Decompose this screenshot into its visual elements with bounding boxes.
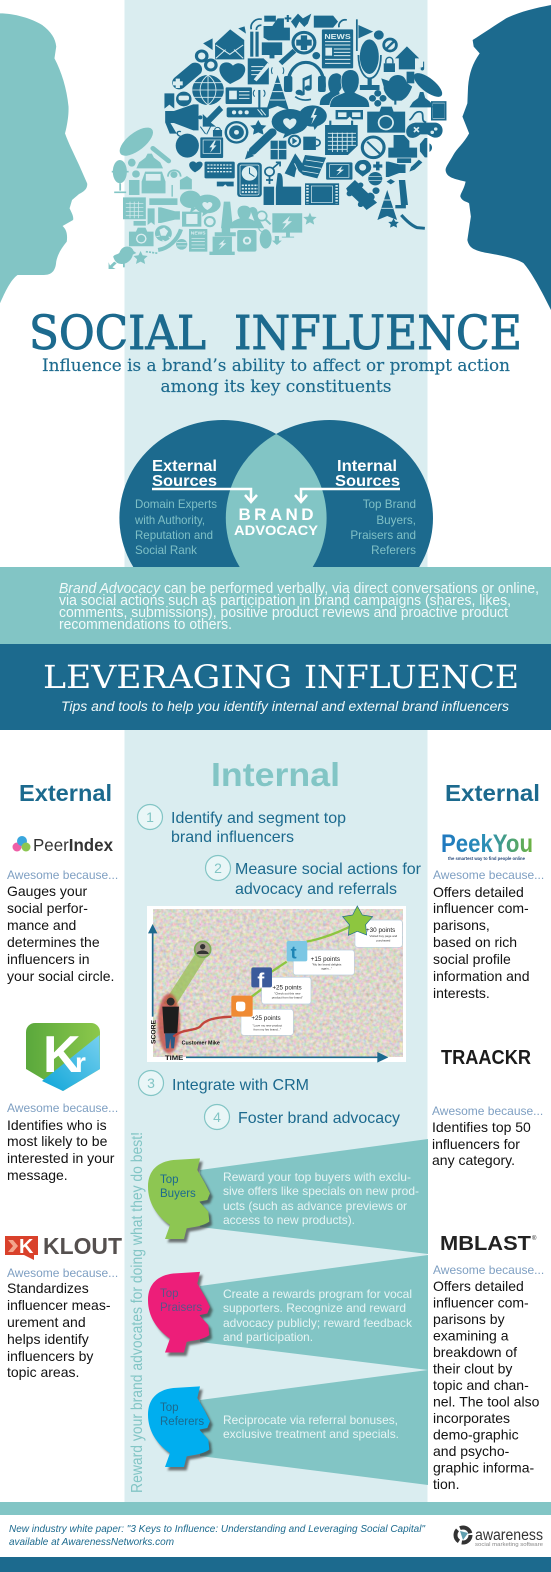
text: traackr: Awesome because... — [432, 1104, 543, 1118]
subtitle — [42, 356, 510, 397]
venn: internal sources text: Buyers, — [376, 514, 416, 527]
step 3 — [138, 1070, 309, 1096]
logo: klout: KLOUT — [43, 1233, 122, 1259]
logo: peerindex: PeerIndex — [33, 835, 113, 855]
logo: peekyou: PeekYou — [441, 830, 533, 858]
icon: star — [343, 906, 373, 935]
beam: buyers — [200, 1139, 428, 1254]
text: mblast: Awesome because... — [433, 1263, 544, 1277]
step 1 — [138, 804, 346, 846]
text: praisers — [223, 1288, 412, 1344]
panel: leveraging influence banner: INFLUENCE — [304, 658, 519, 696]
chart: callout 15 points: +15 points — [311, 956, 340, 963]
text: peekyou: interests. — [433, 985, 490, 1001]
text: peerindex: Gauges your — [7, 883, 87, 899]
step 3: 3 — [147, 1075, 155, 1091]
venn: external circle — [119, 420, 276, 567]
head: referers — [148, 1386, 213, 1470]
label: buyers: Buyers — [160, 1188, 196, 1200]
label: praisers: Praisers — [160, 1302, 202, 1314]
logo: kred: K — [43, 1026, 81, 1084]
icon: facebook: f — [257, 969, 264, 992]
beam: referers — [200, 1370, 428, 1485]
chart: callout 30 points — [355, 920, 402, 947]
text: buyers: access to new products). — [223, 1214, 355, 1227]
panel: leveraging influence banner — [0, 644, 551, 730]
text: traackr: Identifies top 50 — [432, 1119, 531, 1135]
arrow: internal to advocacy — [295, 489, 400, 502]
icon: twitter: t — [291, 942, 297, 962]
text: peekyou: information and — [433, 968, 530, 984]
step 2: Measure social actions for — [235, 861, 422, 878]
step 2 — [206, 856, 422, 898]
chart: score axis — [148, 924, 157, 1044]
panel: brand advocacy definition: comments, submissions), positive product reviews and proactive product — [59, 605, 508, 621]
text: praisers: and participation. — [223, 1331, 313, 1344]
chart: red path — [173, 1017, 232, 1037]
text: mblast: nel. The tool also — [433, 1394, 540, 1410]
footer note: available at AwarenessNetworks.com — [9, 1536, 174, 1548]
vertical label: Reward your brand advocates for doing what they do best! — [129, 1132, 146, 1493]
chart: customer score over time — [147, 906, 406, 1063]
text: peerindex: influencers in — [7, 951, 90, 967]
step 4: 4 — [213, 1109, 221, 1125]
logo: klout — [5, 1233, 122, 1260]
panel: top buyers — [148, 1139, 428, 1254]
text: mblast: examining a — [433, 1328, 509, 1344]
text: klout: influencer meas- — [7, 1297, 111, 1313]
text: klout: Standardizes — [7, 1280, 89, 1296]
text: klout: helps identify — [7, 1331, 89, 1347]
chart: callout 25 points — [241, 1009, 293, 1035]
title — [29, 306, 522, 361]
icon: twitter — [287, 941, 307, 962]
text: kred: Awesome because... — [7, 1101, 118, 1115]
panel: brand advocacy definition: via social actions such as participation in brand campaigns (shares, likes, — [59, 593, 511, 609]
logo: traackr: TRAACKR — [441, 1046, 531, 1069]
icon: facebook — [251, 967, 272, 992]
text: peekyou — [433, 868, 544, 1001]
label: praisers — [160, 1288, 202, 1314]
chart: score axis: SCORE — [150, 1020, 157, 1044]
text: mblast: graphic informa- — [433, 1460, 534, 1476]
venn: internal sources text: Top Brand — [363, 498, 416, 511]
right face silhouette — [446, 5, 551, 310]
panel: top referers — [148, 1370, 428, 1485]
footer dark band — [0, 1557, 551, 1572]
text: mblast: influencer com- — [433, 1294, 529, 1310]
logo: peekyou: the smartest way to find people online — [448, 856, 525, 862]
logo: mblast: MBLAST — [440, 1233, 531, 1255]
text: peekyou: parisons, — [433, 917, 490, 933]
logo: awareness: social marketing software — [475, 1542, 543, 1548]
brand advocacy label: BRAND — [238, 505, 314, 524]
text: traackr — [432, 1104, 543, 1168]
text: peekyou: social profile — [433, 951, 511, 967]
text: klout: urement and — [7, 1314, 86, 1330]
venn: internal sources text: Referers — [371, 544, 416, 557]
heading: external right: External — [445, 780, 540, 806]
head: buyers — [148, 1158, 213, 1242]
chart: customer figure — [158, 993, 180, 1053]
text: klout — [7, 1266, 118, 1380]
chart: callout 25 points facebook: "Check out this new — [274, 992, 301, 996]
chart: green beam — [163, 949, 208, 1007]
chart: callout 25 points facebook — [262, 977, 311, 1004]
text: mblast — [433, 1263, 544, 1492]
text: buyers: ucts (such as advance previews or — [223, 1200, 407, 1213]
label: referers: Top — [160, 1402, 179, 1414]
text: peerindex: social perfor- — [7, 900, 88, 916]
chart: time axis — [165, 1052, 388, 1063]
speech bubble: dark media icons — [164, 14, 446, 228]
text: kred: Identifies who is — [7, 1117, 107, 1133]
step 1: brand influencers — [171, 829, 294, 846]
text: klout: influencers by — [7, 1348, 93, 1364]
arrow: external to advocacy — [152, 489, 257, 502]
brand advocacy label: ADVOCACY — [234, 522, 319, 538]
step 1: Identify and segment top — [171, 810, 346, 827]
footer teal band — [0, 1502, 551, 1515]
text: referers — [223, 1414, 399, 1441]
text: buyers — [223, 1171, 419, 1227]
chart: callout 25 points: from my fav brand..." — [254, 1028, 281, 1032]
step 2: 2 — [214, 860, 222, 876]
text: peerindex: mance and — [7, 917, 76, 933]
venn: internal circle — [276, 420, 433, 567]
chart: callout 30 points: Visited buy page and — [369, 934, 398, 938]
venn: external sources text: Domain Experts — [135, 498, 217, 511]
step 4: Foster brand advocacy — [238, 1110, 400, 1127]
chart: callout 30 points: +30 points — [366, 927, 395, 934]
text: mblast: incorporates — [433, 1410, 510, 1426]
head: praisers — [148, 1272, 213, 1356]
text: peerindex: determines the — [7, 934, 100, 950]
step 3: Integrate with CRM — [172, 1077, 309, 1094]
text: referers: exclusive treatment and specials. — [223, 1428, 399, 1441]
speech bubble: light media icons: NEWS — [191, 231, 206, 237]
panel: leveraging influence banner: LEVERAGING — [43, 658, 292, 696]
chart: callout 30 points: purchased — [376, 939, 391, 943]
text: mblast: parisons by — [433, 1311, 505, 1327]
text: traackr: influencers for — [432, 1136, 520, 1152]
chart: customer name: Customer Mike — [182, 1040, 220, 1046]
text: peerindex: Awesome because... — [7, 868, 118, 882]
chart: callout 25 points facebook: product from fav brand" — [272, 996, 303, 1000]
venn: internal sources text: Sources — [335, 473, 400, 490]
text: peekyou: Awesome because... — [433, 868, 544, 882]
text: traackr: any category. — [432, 1152, 515, 1168]
panel: leveraging influence banner: Tips and tools to help you identify internal and external brand influencers — [61, 699, 509, 714]
text: mblast: demo-graphic — [433, 1426, 519, 1442]
text: kred — [7, 1101, 118, 1183]
panel: top praisers — [148, 1255, 428, 1370]
logo: mblast: ® — [532, 1235, 537, 1242]
logo: awareness: awareness — [475, 1527, 543, 1544]
speech bubble: dark media icons: NEWS — [324, 32, 351, 41]
text: klout: Awesome because... — [7, 1266, 118, 1280]
text: mblast: topic and chan- — [433, 1377, 529, 1393]
chart: callout 25 points: +25 points — [251, 1015, 281, 1022]
subtitle: Influence is a brand’s ability to affect or prompt action — [42, 356, 510, 376]
text: peerindex — [7, 868, 118, 984]
chart: time axis: TIME — [165, 1055, 183, 1062]
text: kred: message. — [7, 1167, 68, 1183]
venn: overlap — [226, 434, 327, 567]
text: peerindex: your social circle. — [7, 968, 114, 984]
left face silhouette — [0, 13, 87, 303]
step 4 — [204, 1104, 400, 1130]
label: buyers: Top — [160, 1174, 179, 1186]
logo: awareness — [456, 1527, 543, 1548]
text: referers: Reciprocate via referral bonuses, — [223, 1414, 398, 1427]
beam: praisers — [200, 1255, 428, 1370]
chart: callout 15 points: "My fav brand delights — [312, 963, 342, 967]
text: peekyou: based on rich — [433, 934, 517, 950]
venn diagram — [119, 420, 433, 567]
footer note — [9, 1523, 426, 1548]
venn: external sources text: Social Rank — [135, 544, 197, 557]
text: buyers: Reward your top buyers with exclu- — [223, 1171, 411, 1184]
text: praisers: supporters. Recognize and reward — [223, 1302, 406, 1315]
panel: brand advocacy definition: recommendations to others. — [59, 617, 232, 633]
label: praisers: Top — [160, 1288, 179, 1300]
chart: callout 15 points — [293, 950, 354, 975]
venn: external sources text: Sources — [152, 473, 217, 490]
chart: green path — [252, 925, 353, 997]
label: buyers — [160, 1174, 196, 1200]
page background column — [124, 0, 428, 1502]
text: praisers: Create a rewards program for vocal — [223, 1288, 412, 1301]
step 1: 1 — [146, 809, 154, 825]
chart: profile badge — [195, 941, 211, 957]
title: SOCIAL — [29, 306, 206, 361]
logo: kred — [26, 1023, 100, 1091]
venn: external sources text — [134, 458, 217, 557]
heading: external left: External — [19, 780, 112, 806]
venn: internal sources text — [335, 458, 416, 557]
text: buyers: sive offers like specials on new prod- — [223, 1185, 419, 1198]
chart: callout 25 points facebook: +25 points — [272, 984, 302, 991]
text: mblast: breakdown of — [433, 1344, 517, 1360]
text: mblast: and psycho- — [433, 1443, 510, 1459]
venn: external sources text: External — [152, 458, 217, 475]
step 2: advocacy and referrals — [235, 881, 397, 898]
venn: external sources text: with Authority, — [134, 514, 205, 527]
subtitle: among its key constituents — [160, 377, 392, 397]
speech bubble: light media icons — [109, 123, 317, 269]
text: mblast: their clout by — [433, 1360, 512, 1376]
chart: callout 25 points: "Love my new product — [253, 1024, 282, 1028]
label: referers — [160, 1402, 204, 1428]
panel: brand advocacy definition — [0, 567, 551, 644]
text: kred: interested in your — [7, 1150, 115, 1166]
text: klout: topic areas. — [7, 1364, 79, 1380]
venn: internal sources text: Praisers and — [350, 529, 416, 542]
heading: internal: Internal — [211, 756, 340, 793]
panel: brand advocacy definition: Brand Advocacy can be performed verbally, via direct conversations or online, — [59, 581, 539, 597]
text: mblast: Offers detailed — [433, 1278, 524, 1294]
text: praisers: advocacy publicly; reward feedback — [223, 1317, 412, 1330]
title: INFLUENCE — [234, 306, 522, 361]
venn: internal sources text: Internal — [337, 458, 397, 475]
label: referers: Referers — [160, 1416, 204, 1428]
logo: klout: K — [19, 1236, 34, 1258]
logo: kred: r — [75, 1047, 86, 1078]
text: peekyou: influencer com- — [433, 900, 529, 916]
venn: external sources text: Reputation and — [135, 529, 213, 542]
chart: callout 15 points: again..." — [321, 967, 332, 971]
text: kred: most likely to be — [7, 1133, 108, 1149]
footer note: New industry white paper: "3 Keys to Influence: Understanding and Leveraging Social Capital" — [9, 1523, 426, 1535]
brand advocacy label — [234, 505, 319, 538]
text: peekyou: Offers detailed — [433, 884, 524, 900]
icon: blogger — [231, 996, 253, 1017]
text: mblast: tion. — [433, 1476, 459, 1492]
